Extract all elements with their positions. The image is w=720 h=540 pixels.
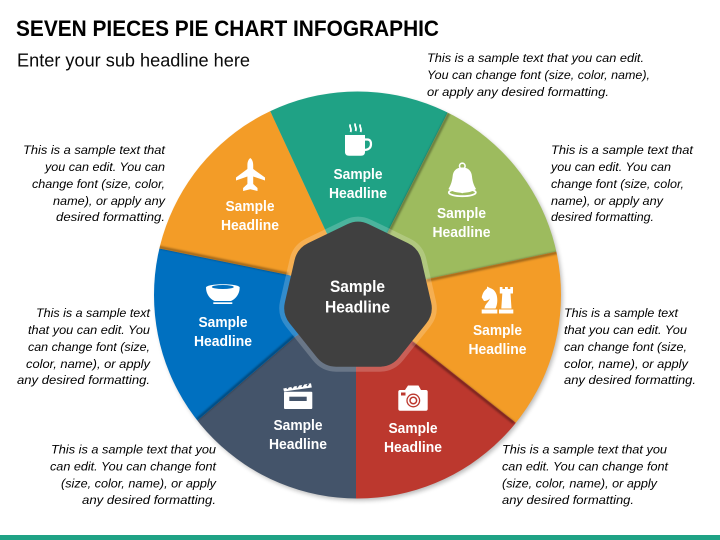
text block: middle left: that you can edit. You (28, 323, 150, 337)
label: orange right (468, 323, 526, 358)
icon: clapperboard (283, 383, 312, 409)
text block: middle right: This is a sample text (564, 306, 679, 320)
text block: lower left: This is a sample text that you (51, 442, 216, 456)
slice: navy (198, 334, 356, 498)
subtitle: Enter your sub headline here (17, 50, 250, 70)
text block: upper left: you can edit. You can (44, 160, 165, 174)
label: teal: Headline (329, 186, 387, 202)
text block: upper left: change font (size, color, (32, 177, 165, 191)
label: orange right: Headline (468, 342, 526, 358)
text block: upper right: This is a sample text that (551, 143, 694, 157)
pie chart (154, 92, 565, 503)
text block: middle left: can change font (size, (28, 340, 150, 354)
text block: upper left (23, 143, 166, 224)
label: orange left: Sample (226, 199, 274, 215)
slice: red (356, 341, 516, 498)
text block: middle right (564, 306, 696, 387)
text block: middle right: color, name), or apply (564, 357, 689, 371)
center hub: Headline (325, 298, 390, 316)
text block: top (427, 51, 650, 99)
label: orange right: Sample (473, 323, 522, 339)
icon: airplane (236, 158, 265, 191)
text block: lower right: (size, color, name), or apply (502, 476, 658, 490)
text block: upper right: desired formatting. (551, 210, 654, 224)
text block: top: or apply any desired formatting. (427, 85, 609, 99)
text block: upper left: name), or apply any (53, 194, 166, 208)
label: orange left (221, 199, 279, 234)
text block: lower right: This is a sample text that you (502, 442, 667, 456)
text block: middle left: color, name), or apply (26, 357, 151, 371)
text block: upper right: change font (size, color, (551, 177, 684, 191)
text block: middle left: any desired formatting. (17, 373, 150, 387)
text block: upper left: desired formatting. (56, 210, 165, 224)
center hub: Sample (330, 278, 385, 296)
label: navy: Sample (274, 418, 322, 434)
label: orange left: Headline (221, 218, 279, 234)
text block: middle left (17, 306, 151, 387)
text block: lower right (502, 442, 669, 507)
slice: orange right (412, 252, 561, 423)
label: green (432, 206, 490, 241)
text block: lower right: can edit. You can change font (502, 460, 669, 474)
label: navy: Headline (269, 437, 327, 453)
text block: lower left: any desired formatting. (82, 493, 216, 507)
label: blue (194, 315, 252, 350)
text block: lower left: (size, color, name), or apply (61, 476, 217, 490)
text block: upper right (550, 143, 694, 224)
icon: camera (398, 386, 428, 411)
text block: upper right: you can edit. You can (550, 160, 671, 174)
text block: top: This is a sample text that you can edit. (427, 51, 644, 65)
text block: upper left: This is a sample text that (23, 143, 166, 157)
slice: orange left (159, 111, 327, 276)
label: green: Headline (432, 225, 490, 241)
label: red: Headline (384, 440, 442, 456)
slice: blue (154, 248, 298, 420)
text block: lower left (50, 442, 217, 507)
text block: upper right: name), or apply any (551, 194, 664, 208)
slice: teal (270, 92, 448, 234)
text block: middle right: any desired formatting. (564, 373, 696, 387)
text block: lower left: can edit. You can change font (50, 460, 217, 474)
icon: bell (448, 163, 476, 196)
icon: bowl (206, 284, 240, 304)
text block: lower right: any desired formatting. (502, 493, 634, 507)
title: SEVEN PIECES PIE CHART INFOGRAPHIC (16, 16, 439, 41)
label: blue: Headline (194, 334, 252, 350)
center hub (284, 222, 432, 367)
label: green: Sample (437, 206, 486, 222)
label: teal: Sample (334, 167, 382, 183)
slice: green (387, 112, 556, 280)
text block: top: You can change font (size, color, name), (427, 68, 650, 82)
label: red: Sample (388, 421, 438, 437)
icon: chess pieces (482, 286, 513, 314)
text block: middle right: that you can edit. You (564, 323, 687, 337)
text block: middle right: can change font (size, (564, 340, 687, 354)
label: blue: Sample (198, 315, 248, 331)
label: red (384, 421, 442, 456)
label: teal (329, 167, 387, 202)
footer bar (0, 535, 720, 540)
label: navy (269, 418, 327, 453)
text block: middle left: This is a sample text (36, 306, 151, 320)
icon: coffee cup (345, 124, 371, 156)
